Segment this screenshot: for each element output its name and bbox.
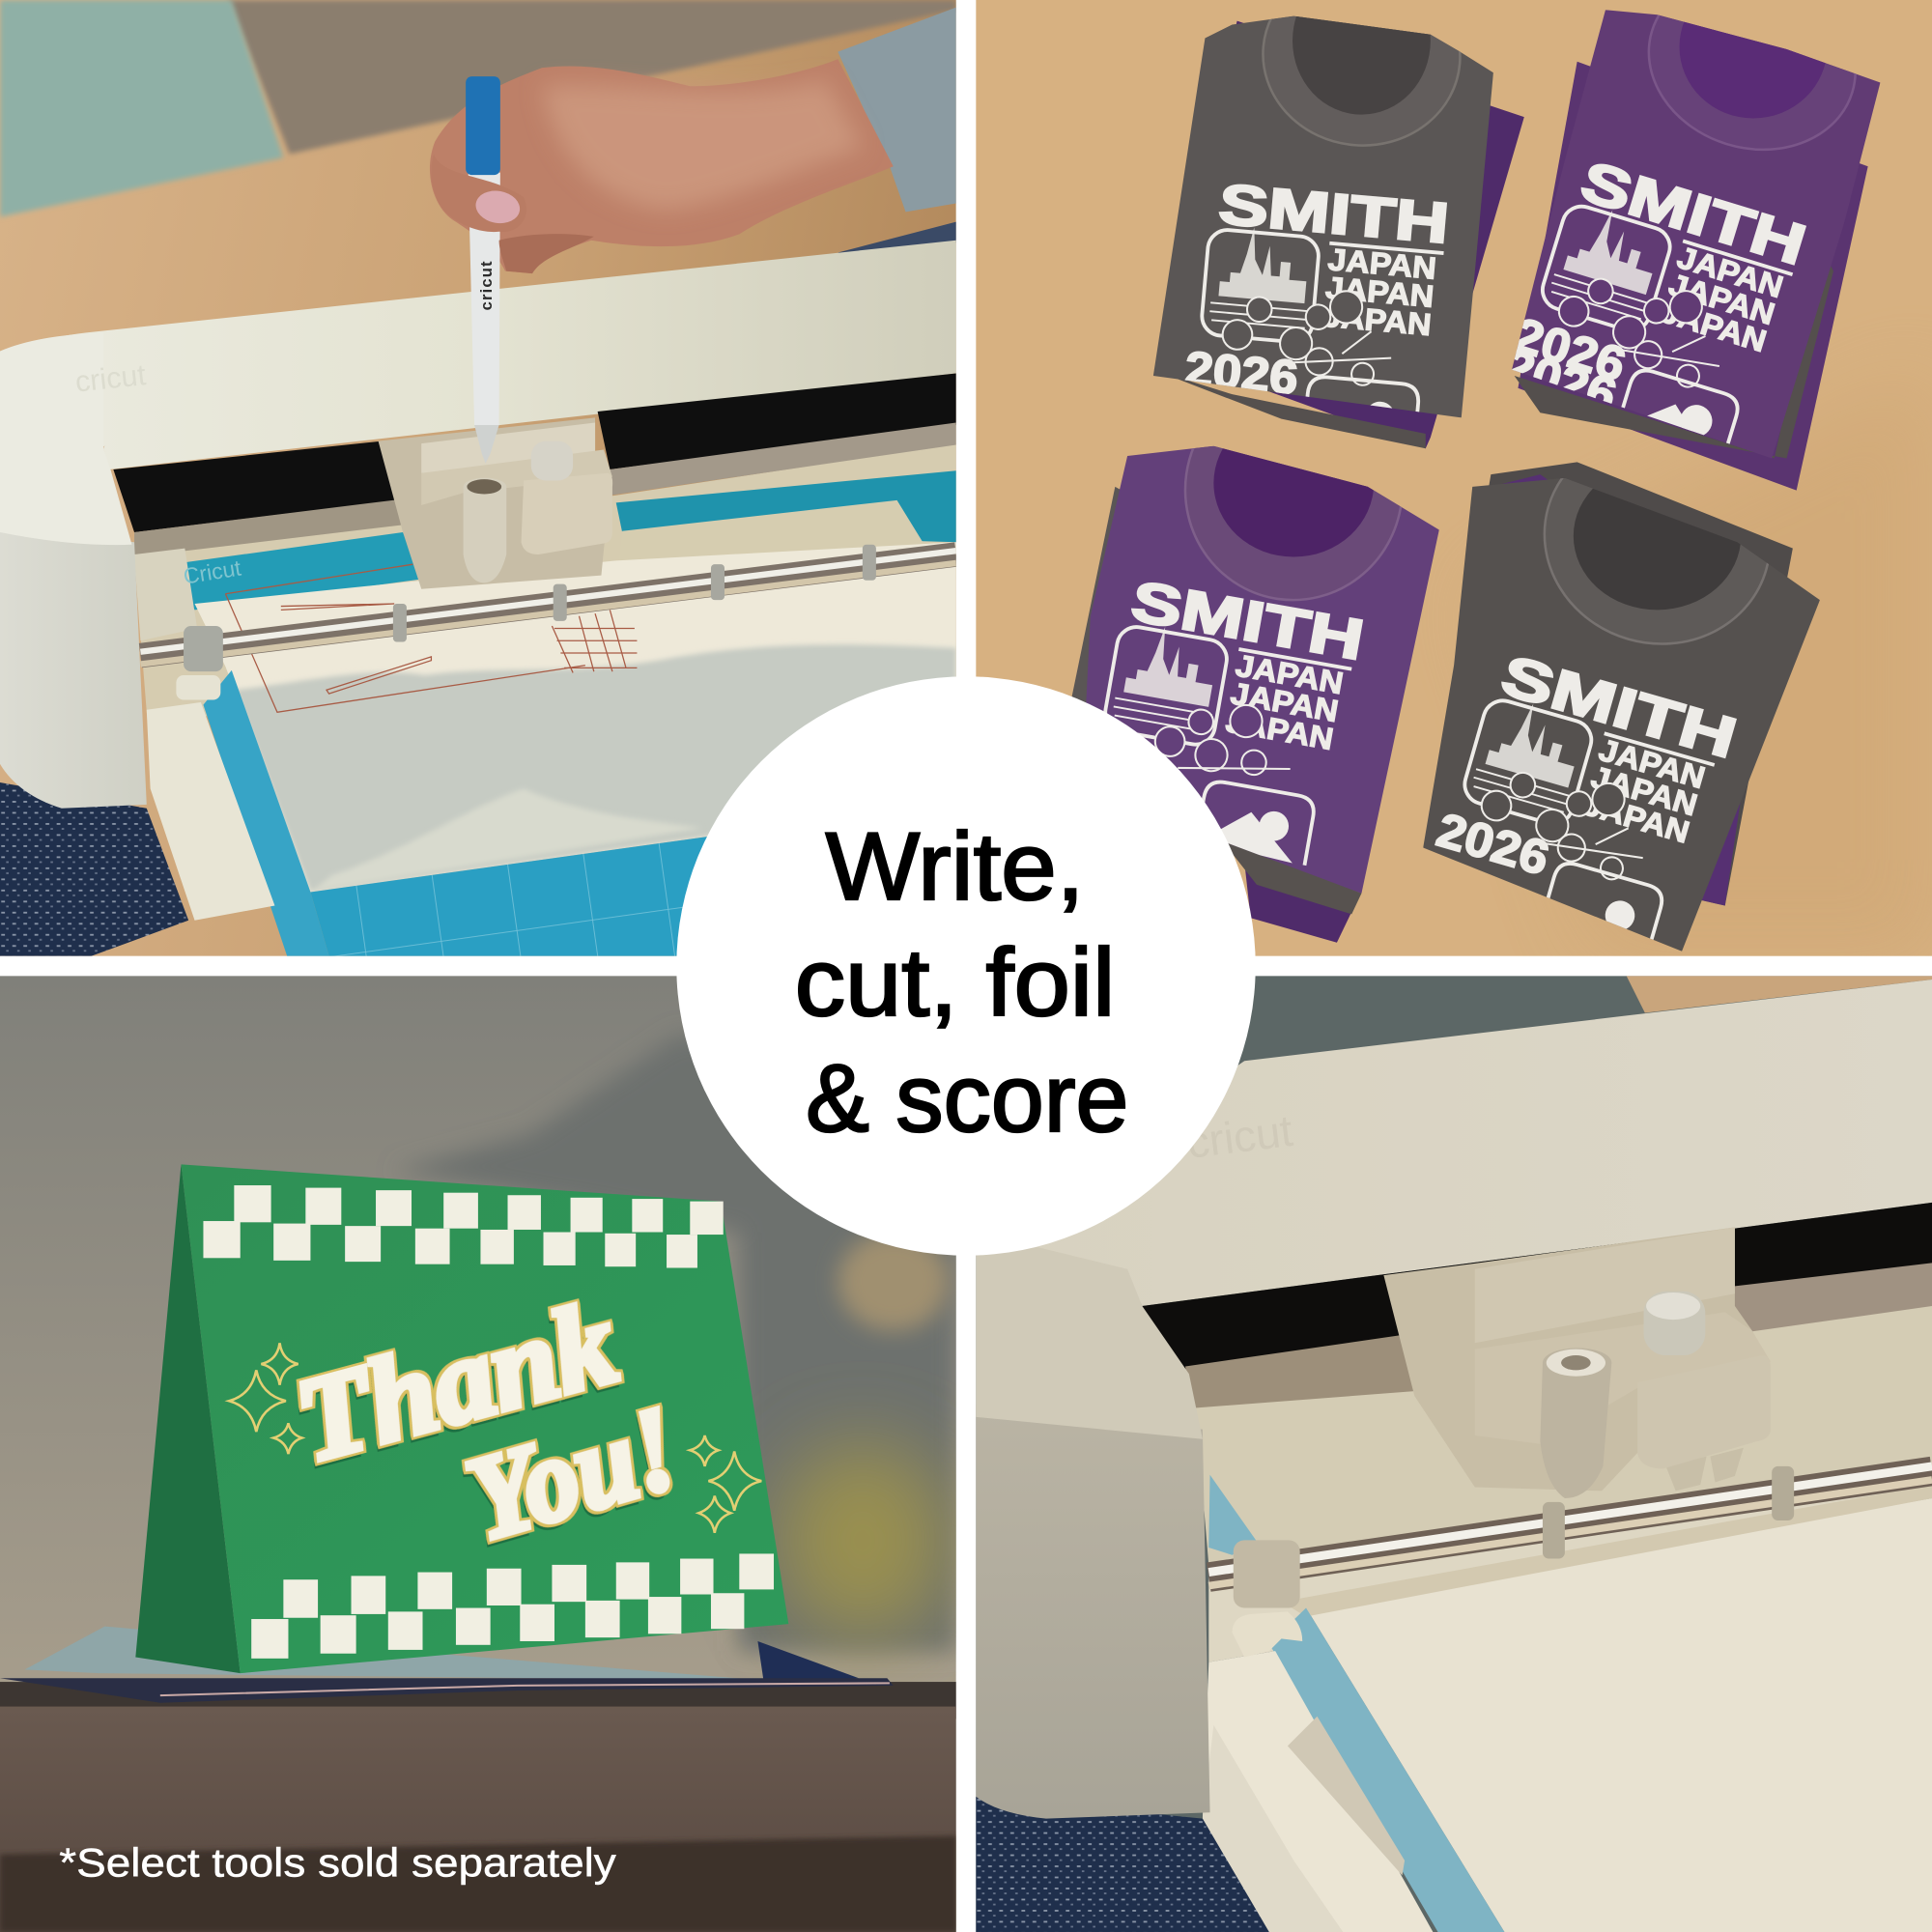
gray layer xyxy=(1515,246,1833,458)
holder inner xyxy=(1561,1355,1591,1370)
mat clip xyxy=(176,675,220,699)
table front xyxy=(0,1707,956,1932)
skyline frame xyxy=(1538,202,1675,335)
gold sparkles xyxy=(229,1343,761,1533)
JAPAN lines three: JAPAN xyxy=(1579,786,1693,850)
greeting You: You! xyxy=(454,1382,692,1565)
card front xyxy=(182,1164,788,1673)
centre white circle badge xyxy=(676,676,1256,1256)
stack layers 4 xyxy=(1430,462,1793,906)
panel: machine closeup xyxy=(976,976,1932,1932)
skyline water stripes xyxy=(1112,698,1212,732)
skyline frame xyxy=(1102,624,1230,748)
blossoms xyxy=(1151,691,1300,787)
mountain frame xyxy=(1541,860,1665,955)
tray xyxy=(1203,1651,1433,1932)
t-shirt: purple front right xyxy=(1479,0,1897,493)
stack layers 3 xyxy=(1072,487,1361,943)
pen holder xyxy=(1540,1348,1611,1498)
pen nib xyxy=(474,425,499,464)
collar ring xyxy=(1171,364,1416,614)
pen body xyxy=(469,173,500,425)
embossed lid logo: cricut xyxy=(73,358,148,399)
JAPAN lines three: JAPAN xyxy=(1657,294,1771,358)
stack layers 1 xyxy=(1153,21,1524,448)
front bed under rod xyxy=(1208,1472,1932,1662)
clamp block right xyxy=(522,473,612,554)
year repeated fold: 2026 xyxy=(1498,338,1623,423)
name: SMITH xyxy=(1126,570,1368,672)
pen xyxy=(466,76,500,464)
name: SMITH xyxy=(1574,150,1812,277)
slot interior xyxy=(1142,1203,1932,1392)
rule xyxy=(1604,731,1715,767)
blossoms xyxy=(1548,256,1738,394)
carriage clamp plate xyxy=(421,450,612,505)
name: SMITH xyxy=(1494,643,1743,771)
mount fuji xyxy=(1199,805,1300,864)
JAPAN lines three: JAPAN xyxy=(1321,298,1433,342)
pen holder opening xyxy=(467,479,501,494)
sun xyxy=(1676,401,1717,440)
slot interior right xyxy=(598,373,956,469)
mountain frame xyxy=(1195,780,1317,866)
navy envelope xyxy=(757,1641,859,1683)
cream bed xyxy=(134,443,956,727)
JAPAN lines two: JAPAN xyxy=(1324,270,1435,314)
tray slide shadow xyxy=(1288,1717,1405,1875)
wall background xyxy=(0,976,956,1932)
stack layers 2 xyxy=(1515,62,1868,491)
carriage back housing xyxy=(379,417,610,589)
purple bottom xyxy=(1244,863,1351,943)
mount fuji xyxy=(1619,391,1722,460)
gray bottom layer xyxy=(1153,370,1426,448)
clamp knob xyxy=(531,454,573,481)
rule xyxy=(1683,240,1793,276)
machine lid xyxy=(66,240,956,469)
teal mat band right xyxy=(616,470,956,542)
panel: printed t-shirts xyxy=(976,0,1932,962)
rod collar xyxy=(1234,1540,1300,1608)
greeting Thank: Thank xyxy=(283,1277,629,1487)
embossed mat logo: Cricut xyxy=(182,554,243,589)
skyline frame xyxy=(1201,228,1321,344)
teal mat band left xyxy=(171,532,421,610)
neck opening xyxy=(1680,0,1828,118)
skyline water stripes xyxy=(1471,769,1571,812)
table surface xyxy=(0,1682,956,1719)
paper bright area xyxy=(195,542,956,892)
upper carriage rail right xyxy=(610,423,956,496)
thumb in front of pen xyxy=(431,154,526,232)
main roller rod xyxy=(140,551,956,665)
shirt print xyxy=(1421,639,1743,962)
skyline water stripes xyxy=(1549,274,1648,320)
pen holder left xyxy=(464,478,506,582)
pink paper edge xyxy=(160,1683,890,1695)
hand highlight xyxy=(542,80,863,210)
circle xyxy=(676,676,1256,1256)
t-shirt: gray front bottom right xyxy=(1405,407,1836,962)
wood table background xyxy=(0,0,956,956)
mountain shadow on wall xyxy=(394,1035,956,1651)
embossed logo: cricut xyxy=(1184,1105,1295,1168)
skyline xyxy=(1218,225,1311,303)
slot interior left xyxy=(113,441,407,532)
hand xyxy=(430,59,894,273)
clamp knob xyxy=(1644,1292,1705,1355)
card back flap xyxy=(135,1164,241,1673)
t-shirt: purple front bottom left xyxy=(1060,364,1466,912)
paper shaded area xyxy=(234,644,956,892)
blue mat strip xyxy=(203,670,329,956)
year: 2026 xyxy=(1182,341,1300,405)
JAPAN lines: JAPAN xyxy=(1673,240,1787,304)
machine lid xyxy=(976,980,1932,1306)
machine body left xyxy=(0,529,147,809)
upper rail left xyxy=(1185,1331,1432,1408)
JAPAN lines two: JAPAN xyxy=(1228,675,1341,728)
rod rings xyxy=(393,545,876,642)
paper stack xyxy=(0,1678,894,1703)
rod collar xyxy=(184,626,223,671)
pen brand: cricut xyxy=(477,261,496,310)
blossoms xyxy=(1471,751,1661,887)
paper sheet xyxy=(1306,1498,1932,1932)
skyline xyxy=(1563,201,1666,295)
upper rail right xyxy=(1722,1263,1932,1336)
knob top icon xyxy=(1646,1293,1700,1320)
gray back xyxy=(1430,462,1793,906)
mountain frame xyxy=(1616,366,1742,464)
lower finger xyxy=(499,234,594,273)
neck opening xyxy=(1574,462,1741,610)
navy woven cloth xyxy=(0,782,188,956)
warm glow upper xyxy=(838,1233,949,1331)
collar ring xyxy=(1520,407,1795,670)
headline line one: Write, xyxy=(826,813,1084,921)
rule xyxy=(1238,647,1352,670)
collar ring xyxy=(1256,0,1467,154)
fabric under the sleeve xyxy=(838,222,956,256)
rod rings xyxy=(1543,1466,1794,1559)
skyline xyxy=(1123,622,1221,707)
back purple xyxy=(1518,62,1868,491)
sun xyxy=(1364,400,1396,433)
navy woven cloth xyxy=(976,1797,1269,1932)
carriage upper box xyxy=(1475,1227,1735,1343)
tray xyxy=(147,702,274,921)
left side block behind rod xyxy=(134,549,197,640)
shirt print xyxy=(1085,568,1368,868)
shirt body xyxy=(1060,431,1466,912)
collar ring xyxy=(1627,0,1878,175)
back purple layer xyxy=(1158,21,1524,448)
cream bed xyxy=(1195,1293,1932,1565)
lid left corner xyxy=(976,1233,1203,1439)
footnote: *Select tools sold separately xyxy=(59,1840,616,1886)
shirt body xyxy=(1405,469,1836,961)
shirt print xyxy=(1180,171,1452,441)
upper carriage rail left xyxy=(134,499,403,557)
mountain frame xyxy=(1304,376,1420,440)
neck opening xyxy=(1293,0,1431,115)
year: 2026 xyxy=(1431,803,1555,886)
JAPAN lines two: JAPAN xyxy=(1587,759,1701,822)
clamp block xyxy=(1637,1355,1771,1468)
carriage plate xyxy=(1475,1312,1771,1444)
wood behind machine xyxy=(1627,976,1932,1012)
purple layer xyxy=(1430,474,1775,906)
gray bottom layer xyxy=(1220,838,1361,914)
blue strip xyxy=(1269,1608,1504,1932)
carriage housing xyxy=(1383,1227,1752,1491)
strip upper section xyxy=(1208,1475,1257,1555)
headline line two: cut, foil xyxy=(795,929,1115,1037)
gray under layer xyxy=(1072,487,1361,894)
panel: pen writing on the machine xyxy=(0,0,956,956)
paper on mat at right xyxy=(622,500,923,541)
curtain backdrop xyxy=(228,0,956,154)
carriage upper block xyxy=(421,423,595,473)
checker band bottom xyxy=(251,1553,774,1659)
blossoms xyxy=(1219,280,1397,387)
headline line three: & score xyxy=(806,1045,1128,1152)
shirt print xyxy=(1496,144,1812,468)
wood background xyxy=(976,0,1932,956)
skyline frame xyxy=(1461,696,1596,829)
red drawn lines xyxy=(225,564,637,712)
wood tone variation xyxy=(1479,370,1932,956)
JAPAN lines: JAPAN xyxy=(1233,647,1346,700)
background xyxy=(976,976,1932,1932)
clamp feet xyxy=(1665,1448,1744,1491)
rule xyxy=(1329,242,1444,255)
name: SMITH xyxy=(1216,173,1452,255)
JAPAN lines three: JAPAN xyxy=(1223,703,1336,756)
holder opening xyxy=(1547,1350,1605,1377)
sun xyxy=(1602,897,1638,934)
rod shadow on paper xyxy=(1282,1485,1932,1616)
t-shirt: gray front left xyxy=(1109,0,1528,443)
main roller rod xyxy=(1208,1466,1932,1586)
paper sun patch xyxy=(310,788,702,892)
shirt body xyxy=(1109,0,1528,443)
blue mat grid xyxy=(310,837,707,956)
sweater sleeve xyxy=(838,8,956,212)
shirt body xyxy=(1479,0,1897,493)
fingernail xyxy=(473,187,523,227)
table lower dark band xyxy=(0,1836,956,1932)
sun xyxy=(1257,809,1291,843)
skyline xyxy=(1486,696,1588,788)
neck opening xyxy=(1213,409,1374,557)
JAPAN lines: JAPAN xyxy=(1595,732,1709,795)
teal chair xyxy=(0,0,283,216)
checker band top xyxy=(203,1185,724,1267)
mat clip xyxy=(1233,1611,1302,1658)
tray shaded edge xyxy=(1203,1725,1343,1932)
JAPAN lines two: JAPAN xyxy=(1665,267,1778,331)
machine body xyxy=(976,1405,1210,1819)
skyline water stripes xyxy=(1209,302,1309,328)
pen cap xyxy=(466,76,500,175)
year: 2026 xyxy=(1508,307,1632,392)
warm glow lower xyxy=(777,1441,949,1638)
pale envelope xyxy=(25,1627,766,1681)
JAPAN lines: JAPAN xyxy=(1326,242,1437,286)
lid shoulder xyxy=(0,332,131,545)
panel: foil thank you card xyxy=(0,976,956,1932)
